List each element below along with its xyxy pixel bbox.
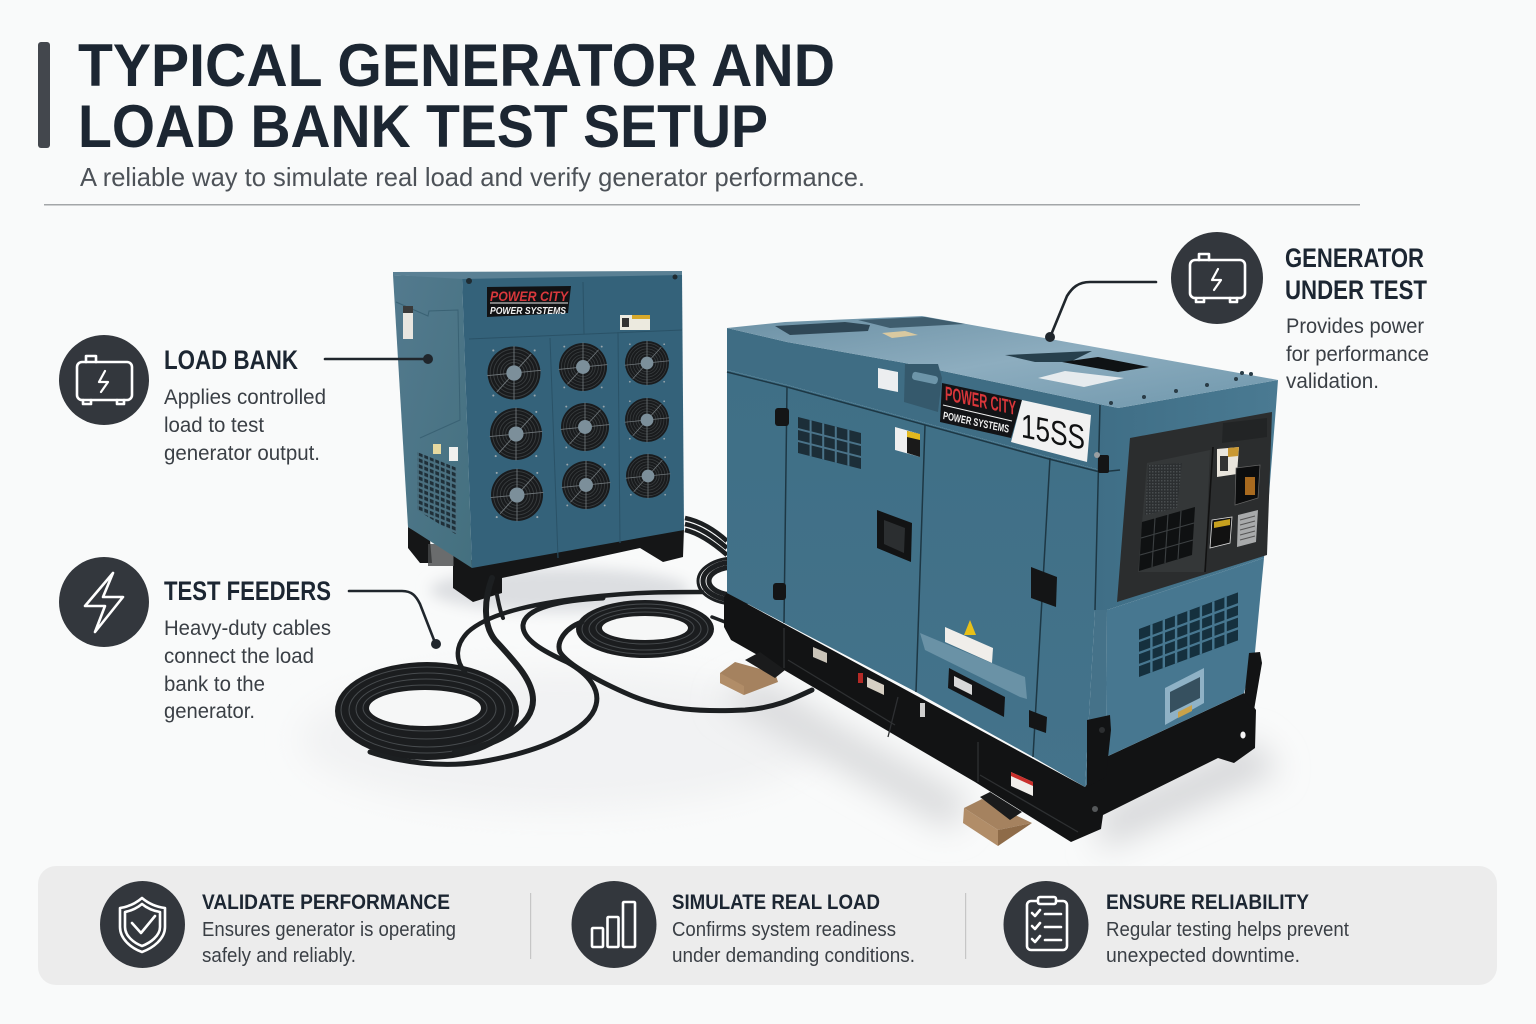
generator logo: POWER SYSTEMS (943, 410, 1009, 436)
generator lid front (727, 328, 1118, 470)
wooden block right (963, 799, 1032, 846)
benefit: simulate real load (572, 881, 915, 968)
benefit: simulate real load: SIMULATE REAL LOAD (672, 891, 880, 914)
icon: shield (100, 881, 185, 968)
icon: clipboard (1004, 881, 1088, 968)
generator logo: POWER CITY (945, 383, 1016, 420)
lower side data plate (1165, 668, 1204, 725)
label: load bank: load to test (164, 414, 264, 437)
load bank (393, 271, 684, 602)
generator base frame (724, 593, 1256, 842)
fan array (487, 341, 670, 522)
benefit: validate performance: safely and reliably. (202, 945, 356, 967)
benefit: ensure reliability: Regular testing helps prevent (1106, 919, 1349, 941)
accent bar (38, 42, 50, 148)
benefit: ensure reliability: unexpected downtime. (1106, 945, 1300, 967)
wooden block left (720, 662, 778, 695)
label: generator under test: UNDER TEST (1285, 275, 1427, 305)
generator under test (724, 316, 1278, 842)
label: test feeders: generator. (164, 700, 255, 723)
load bank logo: POWER CITY (490, 288, 569, 304)
load bank feet (408, 527, 684, 602)
callout: test feeders (349, 591, 441, 649)
model badge 15SS (1011, 400, 1091, 462)
base labels (813, 647, 1246, 812)
generator long face (727, 370, 1100, 787)
label: generator under test: for performance (1286, 343, 1429, 366)
title: TYPICAL GENERATOR AND (78, 32, 835, 99)
label: load bank (59, 335, 326, 465)
load bank front (462, 273, 684, 568)
label: generator under test (1171, 232, 1429, 393)
generator logo (940, 383, 1022, 438)
benefit: validate performance: VALIDATE PERFORMANCE (202, 891, 450, 914)
label: test feeders: connect the load (164, 645, 314, 668)
load bank side (393, 275, 472, 568)
label: test feeders (59, 557, 331, 723)
lifting handle recess (904, 364, 942, 412)
load bank logo (487, 286, 571, 317)
hinges (773, 408, 1109, 733)
icon: lightning bolt (59, 557, 149, 647)
label: load bank: LOAD BANK (164, 345, 298, 375)
cables behind generator (685, 518, 772, 604)
icon: load bank (59, 335, 149, 425)
benefit: ensure reliability: ENSURE RELIABILITY (1106, 891, 1309, 914)
title: LOAD BANK TEST SETUP (78, 93, 768, 160)
benefit: simulate real load: under demanding conditions. (672, 945, 915, 967)
load bank logo: POWER SYSTEMS (490, 306, 566, 317)
generator top (727, 316, 1278, 408)
label: test feeders: TEST FEEDERS (164, 576, 331, 606)
roof vents (775, 317, 1253, 405)
icon: generator (1171, 232, 1263, 324)
label: generator under test: GENERATOR (1285, 243, 1424, 273)
corner brackets (1087, 652, 1262, 787)
door seams (727, 372, 1120, 757)
callout: load bank (325, 354, 433, 364)
label: test feeders: bank to the (164, 673, 265, 696)
label: generator under test: Provides power (1286, 315, 1424, 338)
floor shadows (300, 568, 1280, 850)
icon: bar chart (572, 881, 656, 968)
benefit: validate performance (100, 881, 456, 968)
label: load bank: generator output. (164, 442, 320, 465)
door vent (798, 417, 861, 469)
benefit: simulate real load: Confirms system readiness (672, 919, 896, 941)
door latch (877, 510, 912, 562)
medium coil (576, 600, 714, 658)
test feeder cables (335, 578, 812, 764)
panel: benefits (38, 866, 1497, 985)
benefit: ensure reliability (1004, 881, 1349, 968)
label: generator under test: validation. (1286, 370, 1379, 393)
lower side vent (1139, 592, 1238, 677)
label: test feeders: Heavy-duty cables (164, 617, 331, 640)
title (78, 32, 835, 160)
control panel (1117, 412, 1272, 602)
door stickers (878, 368, 1100, 717)
model badge 15SS: 15SS (1021, 407, 1085, 458)
subtitle: A reliable way to simulate real load and verify generator performance. (80, 162, 865, 192)
benefit: validate performance: Ensures generator is operating (202, 919, 456, 941)
label: load bank: Applies controlled (164, 386, 326, 409)
callout: generator (1045, 282, 1156, 342)
large coil (335, 662, 519, 760)
generator right side (1085, 380, 1278, 787)
